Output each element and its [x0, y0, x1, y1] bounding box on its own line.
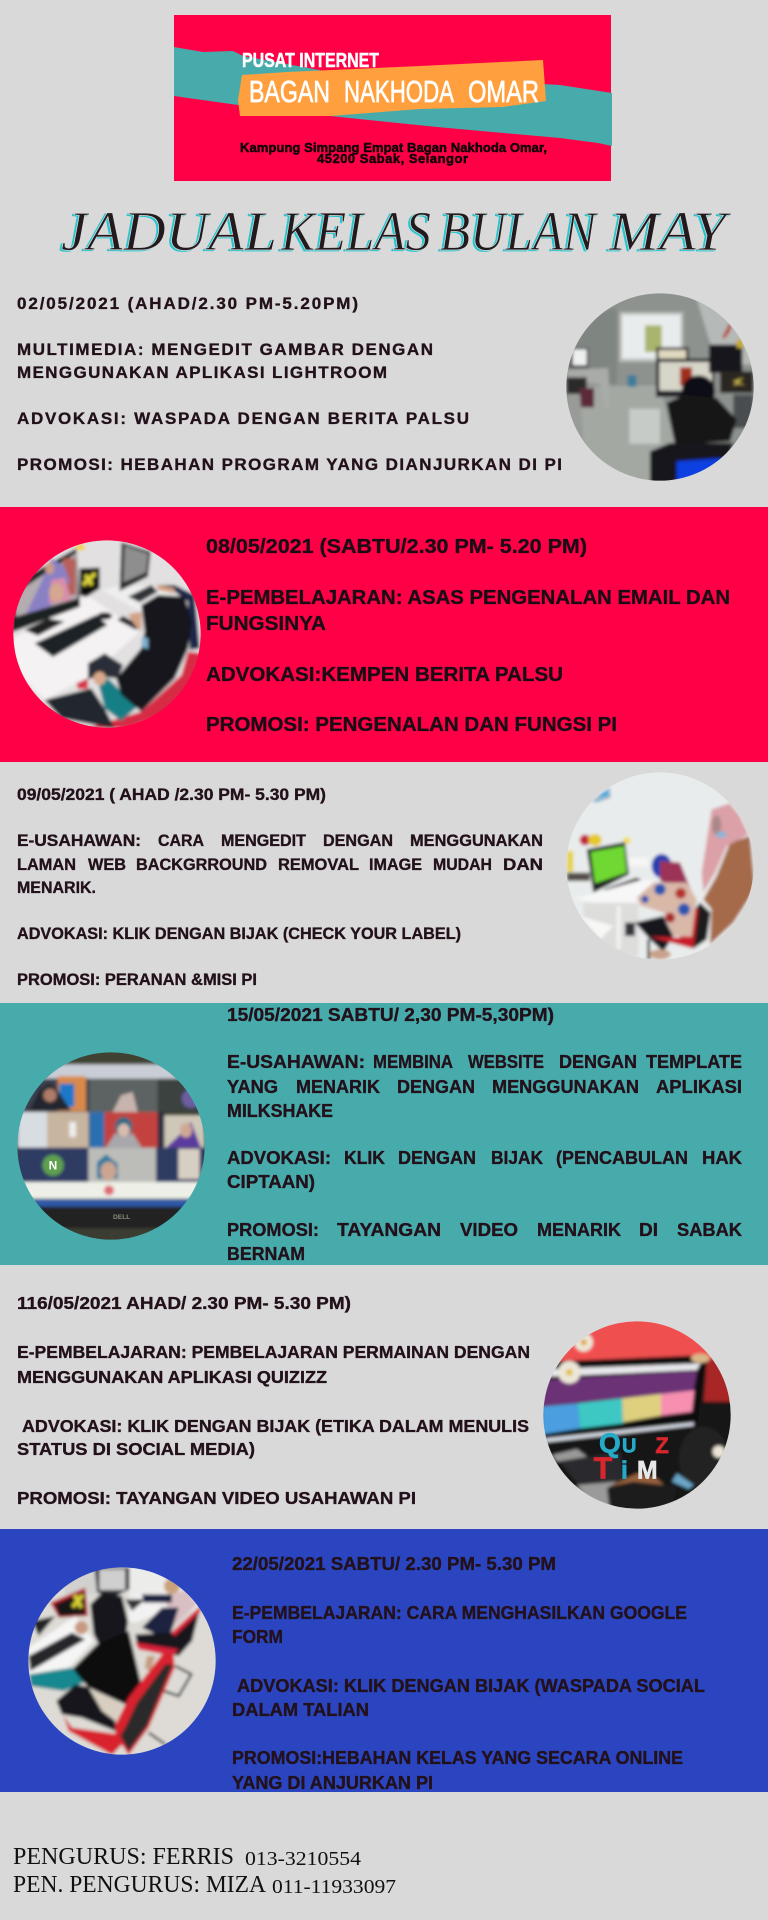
schedule text 15/05/2021: KLIK	[344, 1148, 385, 1168]
schedule text 15/05/2021	[227, 1005, 742, 1264]
photo: student with green screen and supervisor	[566, 772, 754, 960]
schedule text 08/05/2021: 08/05/2021 (SABTU/2.30 PM- 5.20 PM)	[206, 536, 587, 558]
schedule text 09/05/2021: PROMOSI: PERANAN &MISI PI	[17, 971, 257, 989]
schedule text 15/05/2021: MENARIK	[537, 1220, 621, 1240]
logo address: 45200 Sabak, Selangor	[317, 151, 468, 166]
schedule text 15/05/2021: 15/05/2021 SABTU/ 2,30 PM-5,30PM)	[227, 1005, 554, 1025]
logo heading: Bagan Nakhoda Omar: OMAR	[468, 74, 539, 109]
schedule text 15/05/2021: MENGGUNAKAN	[492, 1077, 639, 1097]
schedule text 02/05/2021: 02/05/2021 (AHAD/2.30 PM-5.20PM)	[17, 294, 358, 313]
title	[61, 201, 732, 263]
schedule text 15/05/2021: DENGAN	[397, 1077, 475, 1097]
monitor brand label: DELL	[113, 1214, 130, 1221]
schedule text 16/05/2021: ADVOKASI: KLIK DENGAN BIJAK (ETIKA DALAM MENULIS	[22, 1416, 529, 1436]
schedule text 02/05/2021: ADVOKASI: WASPADA DENGAN BERITA PALSU	[17, 409, 469, 428]
logo heading: Bagan Nakhoda Omar: NAKHODA	[344, 74, 454, 109]
schedule text 08/05/2021: ADVOKASI:KEMPEN BERITA PALSU	[206, 664, 563, 686]
schedule text 09/05/2021: MENGGUNAKAN	[410, 832, 543, 850]
schedule text 22/05/2021: 22/05/2021 SABTU/ 2.30 PM- 5.30 PM	[232, 1554, 556, 1574]
contact: assistant manager	[13, 1872, 396, 1898]
title: JADUAL	[61, 201, 277, 263]
schedule text 22/05/2021: ADVOKASI: KLIK DENGAN BIJAK (WASPADA SOCIAL	[237, 1676, 705, 1696]
schedule text 15/05/2021: DENGAN	[559, 1052, 637, 1072]
schedule text 16/05/2021: E-PEMBELAJARAN: PEMBELAJARAN PERMAINAN DENGAN	[17, 1342, 530, 1362]
logo address: Kampung Simpang Empat Bagan Nakhoda Omar,	[240, 140, 547, 155]
schedule text 15/05/2021: HAK	[702, 1148, 742, 1168]
contact: manager	[13, 1844, 361, 1870]
schedule text 15/05/2021: PROMOSI:	[227, 1220, 319, 1240]
schedule text 09/05/2021: MENGEDIT	[221, 832, 306, 850]
schedule text 09/05/2021: IMAGE	[369, 856, 422, 874]
schedule text 15/05/2021: ADVOKASI:	[227, 1148, 331, 1168]
schedule text 09/05/2021: E-USAHAWAN:	[17, 832, 141, 850]
orange brush stripe	[238, 60, 546, 116]
sticker: quiz time: i	[621, 1457, 628, 1484]
schedule text 08/05/2021: E-PEMBELAJARAN: ASAS PENGENALAN EMAIL DAN	[206, 587, 730, 609]
schedule text 09/05/2021: LAMAN	[17, 856, 76, 874]
schedule text 09/05/2021: 09/05/2021 ( AHAD /2.30 PM- 5.30 PM)	[17, 786, 326, 804]
sticker: quiz time: Q	[599, 1427, 621, 1458]
sticker: quiz time: U	[622, 1435, 636, 1457]
contact: manager: PENGURUS: FERRIS	[13, 1844, 234, 1870]
panel: class 09/05/2021	[17, 766, 760, 989]
schedule text 15/05/2021: WEBSITE	[468, 1052, 544, 1072]
schedule text 08/05/2021: FUNGSINYA	[206, 613, 326, 635]
sticker: quiz time: M	[637, 1457, 658, 1484]
schedule text 02/05/2021: MENGGUNAKAN APLIKASI LIGHTROOM	[17, 363, 387, 382]
schedule text 09/05/2021: REMOVAL	[278, 856, 359, 874]
schedule text 02/05/2021	[17, 294, 562, 474]
logo banner	[174, 15, 612, 181]
panel: class 22/05/2021	[0, 1529, 768, 1793]
schedule text 02/05/2021: MULTIMEDIA: MENGEDIT GAMBAR DENGAN	[17, 340, 433, 359]
panel: class 15/05/2021	[0, 1003, 768, 1265]
schedule text 22/05/2021	[232, 1554, 705, 1793]
schedule text 22/05/2021: DALAM TALIAN	[232, 1700, 369, 1720]
schedule text 16/05/2021: STATUS DI SOCIAL MEDIA)	[17, 1439, 255, 1459]
sticker: quiz time	[594, 1432, 668, 1479]
sticker: quiz time: T	[594, 1451, 613, 1485]
title: MAY	[608, 201, 732, 263]
contact footer	[13, 1844, 396, 1898]
schedule text 22/05/2021: YANG DI ANJURKAN PI	[232, 1773, 433, 1793]
logo heading: Bagan Nakhoda Omar	[249, 74, 539, 109]
schedule text 09/05/2021: BACKGRROUND	[136, 856, 267, 874]
panel: class 16/05/2021	[17, 1293, 737, 1515]
title: KELAS	[280, 201, 431, 263]
logo heading: Bagan Nakhoda Omar: BAGAN	[249, 74, 330, 109]
schedule text 15/05/2021: VIDEO	[460, 1220, 518, 1240]
schedule text 09/05/2021: DENGAN	[323, 832, 393, 850]
schedule text 22/05/2021: FORM	[232, 1627, 283, 1647]
schedule text 15/05/2021: YANG	[227, 1077, 278, 1097]
schedule text 09/05/2021: WEB	[88, 856, 126, 874]
schedule text 08/05/2021: PROMOSI: PENGENALAN DAN FUNGSI PI	[206, 714, 617, 736]
contact: manager: 013-3210554	[245, 1848, 361, 1870]
teal brush stripe	[174, 47, 612, 146]
schedule text 16/05/2021	[17, 1293, 530, 1508]
schedule text 09/05/2021	[17, 786, 543, 989]
photo: students in red chairs	[28, 1567, 216, 1755]
icon: green N avatar: N	[49, 1159, 57, 1173]
schedule text 15/05/2021: MENARIK	[296, 1077, 380, 1097]
photo: Quizizz on monitor	[543, 1321, 731, 1509]
schedule text 15/05/2021: APLIKASI	[656, 1077, 742, 1097]
schedule text 15/05/2021: DI	[639, 1220, 658, 1240]
schedule text 09/05/2021: ADVOKASI: KLIK DENGAN BIJAK (CHECK YOUR LABEL)	[17, 925, 461, 943]
schedule text 15/05/2021: TAYANGAN	[337, 1220, 441, 1240]
schedule text 15/05/2021: BERNAM	[227, 1244, 305, 1264]
schedule text 15/05/2021: TEMPLATE	[646, 1052, 742, 1072]
logo heading: Pusat Internet: PUSAT INTERNET	[242, 50, 379, 72]
schedule text 15/05/2021: (PENCABULAN	[556, 1148, 688, 1168]
schedule text 09/05/2021: MENARIK.	[17, 879, 96, 897]
schedule text 02/05/2021: PROMOSI: HEBAHAN PROGRAM YANG DIANJURKAN DI PI	[17, 455, 562, 474]
photo: student at keyboard with video call	[13, 540, 201, 728]
schedule text 15/05/2021: MEMBINA	[373, 1052, 453, 1072]
panel: class 08/05/2021	[0, 507, 768, 762]
schedule text 15/05/2021: CIPTAAN)	[227, 1172, 315, 1192]
schedule text 22/05/2021: E-PEMBELAJARAN: CARA MENGHASILKAN GOOGLE	[232, 1603, 687, 1623]
sticker: quiz time: Z	[655, 1433, 669, 1458]
schedule text 09/05/2021: CARA	[158, 832, 204, 850]
photo: video call on Dell monitor	[17, 1052, 205, 1240]
logo address	[240, 140, 547, 166]
schedule text 09/05/2021: MUDAH	[433, 856, 492, 874]
title: BULAN	[440, 201, 598, 263]
panel: class 02/05/2021	[17, 288, 760, 488]
schedule text 15/05/2021: DENGAN	[398, 1148, 476, 1168]
contact: assistant manager: PEN. PENGURUS: MIZA	[13, 1872, 267, 1898]
schedule text 16/05/2021: 116/05/2021 AHAD/ 2.30 PM- 5.30 PM)	[17, 1293, 351, 1313]
photo: computer room with whiteboard	[566, 293, 754, 481]
schedule text 08/05/2021	[206, 536, 730, 736]
schedule text 15/05/2021: MILKSHAKE	[227, 1101, 333, 1121]
schedule text 16/05/2021: PROMOSI: TAYANGAN VIDEO USAHAWAN PI	[17, 1488, 416, 1508]
schedule text 16/05/2021: MENGGUNAKAN APLIKASI QUIZIZZ	[17, 1367, 327, 1387]
schedule text 22/05/2021: PROMOSI:HEBAHAN KELAS YANG SECARA ONLINE	[232, 1748, 683, 1768]
contact: assistant manager: 011-11933097	[272, 1876, 396, 1898]
schedule text 09/05/2021: DAN	[503, 856, 543, 874]
schedule text 15/05/2021: BIJAK	[491, 1148, 543, 1168]
schedule text 15/05/2021: SABAK	[677, 1220, 742, 1240]
schedule text 15/05/2021: E-USAHAWAN:	[227, 1052, 365, 1072]
